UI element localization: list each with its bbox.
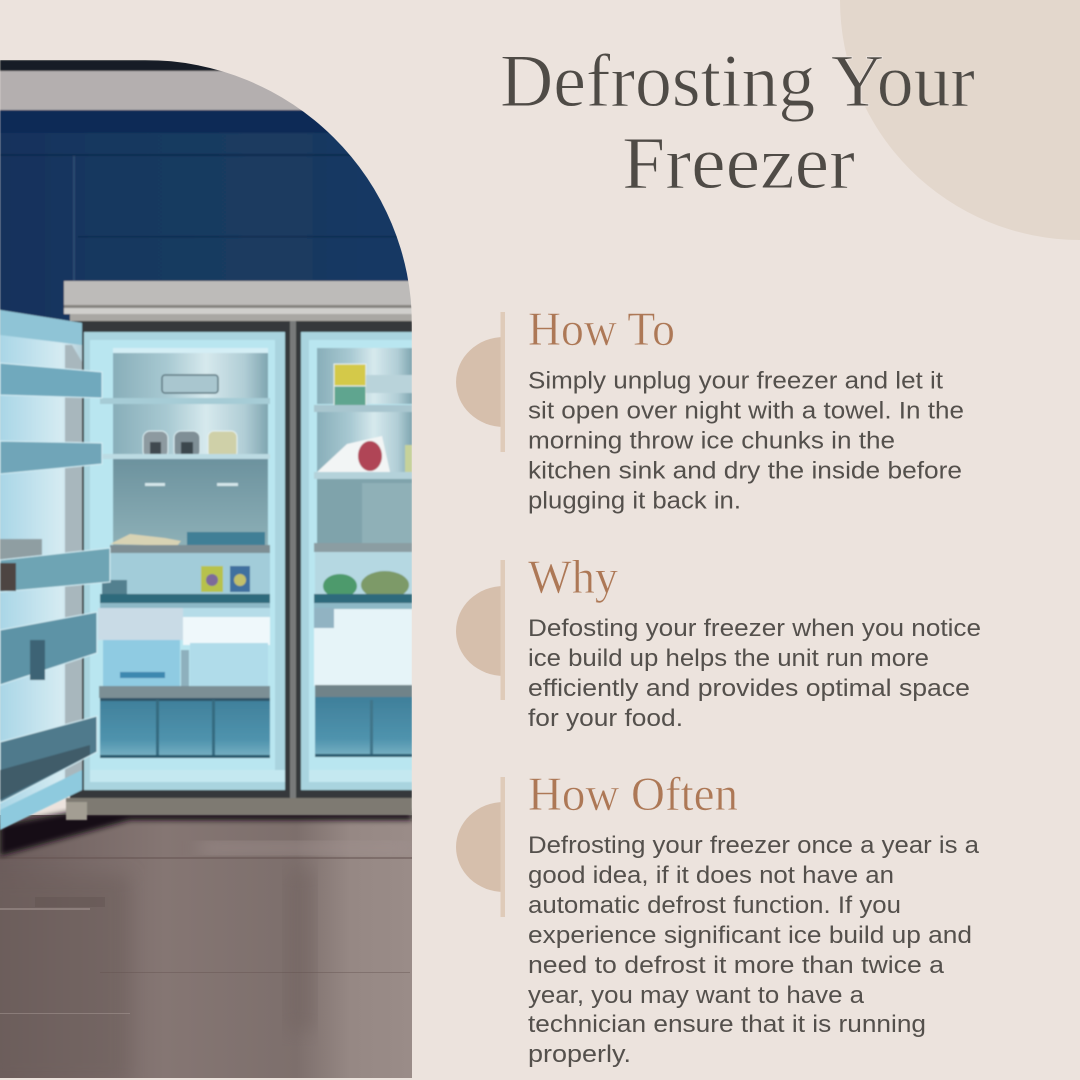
left compartment [84, 332, 285, 790]
open door [0, 310, 110, 830]
bottom drawer [100, 698, 270, 758]
photo: open refrigerator in arched frame [0, 60, 412, 1080]
back wall middle [113, 404, 268, 456]
white lower wall [314, 609, 412, 686]
section: how to [456, 303, 964, 514]
white panel [183, 617, 270, 645]
section: how often [456, 768, 979, 1068]
shelf two [314, 472, 412, 479]
shelf three [110, 545, 270, 553]
shelf five [315, 685, 412, 697]
green food box [334, 386, 366, 407]
yellow food box [334, 364, 366, 386]
blue cup [230, 566, 250, 592]
body text: Simply unplug your freezer and let it [528, 368, 943, 394]
steel back panel [113, 459, 268, 546]
door hinge column [65, 345, 82, 780]
body text: properly. [528, 1041, 631, 1068]
body text: kitchen sink and dry the inside before [528, 458, 962, 484]
shadow under fridge [0, 812, 412, 856]
shelf one [314, 405, 412, 412]
white bag with red fruit [317, 436, 412, 472]
vertical rule [500, 312, 505, 452]
shelf three [314, 543, 412, 552]
yellow cup [201, 566, 223, 592]
door bin one [0, 363, 102, 398]
body text: Defosting your freezer when you notice [528, 615, 981, 642]
shelf four [314, 594, 412, 603]
heading: Why [528, 551, 618, 604]
body text [528, 615, 981, 732]
body text: good idea, if it does not have an [528, 862, 894, 889]
shelf one [100, 398, 270, 404]
title [500, 40, 975, 205]
label plate [162, 375, 218, 393]
right compartment [301, 332, 412, 790]
body text: experience significant ice build up and [528, 922, 972, 949]
jars [143, 431, 237, 458]
body text: plugging it back in. [528, 488, 741, 514]
title: Defrosting Your [500, 40, 975, 123]
half circle marker [456, 802, 504, 892]
back wall top [113, 348, 268, 400]
body text: morning throw ice chunks in the [528, 428, 895, 454]
section: why [456, 551, 981, 732]
lavender panel [98, 608, 183, 640]
decorative quarter circle top right [840, 0, 1080, 240]
half circle marker [456, 337, 504, 427]
steel top of fridge [64, 281, 412, 321]
dark ceiling strip [0, 60, 224, 72]
title: Freezer [622, 122, 855, 205]
steel back panel [317, 479, 412, 544]
ceiling [0, 70, 303, 112]
shelf five [99, 686, 270, 698]
bins [103, 640, 268, 686]
bottom drawer [315, 697, 412, 757]
vertical rule [500, 777, 505, 917]
crisper top [102, 553, 270, 597]
body text [528, 832, 979, 1068]
door bin four [0, 612, 97, 685]
lower frame [309, 770, 412, 782]
body text: sit open over night with a towel. In the [528, 398, 964, 424]
body text: technician ensure that it is running [528, 1011, 926, 1038]
door bin three [0, 548, 110, 592]
body text [528, 368, 964, 514]
body text: Defrosting your freezer once a year is a [528, 832, 979, 859]
door jars [0, 539, 42, 561]
shelf two [100, 454, 270, 459]
door bin five [0, 716, 97, 803]
body text: need to defrost it more than twice a [528, 952, 944, 979]
vertical rule [500, 560, 505, 700]
label plate [366, 375, 412, 393]
half circle marker [456, 586, 504, 676]
body text: automatic defrost function. If you [528, 892, 901, 919]
fridge frame [70, 321, 412, 798]
body text: for your food. [528, 705, 683, 732]
body text: ice build up helps the unit run more [528, 645, 929, 672]
crisper with greens [315, 552, 412, 599]
lower frame [90, 770, 285, 782]
small grey tag [314, 608, 334, 628]
heading: How To [528, 303, 675, 356]
navy wall [0, 110, 412, 325]
body text: year, you may want to have a [528, 982, 864, 1009]
door lower edge [0, 770, 82, 830]
shelf four [100, 594, 270, 603]
heading: How Often [528, 768, 738, 821]
floor [0, 812, 412, 1080]
body text: efficiently and provides optimal space [528, 675, 970, 702]
fridge base [66, 798, 412, 820]
blue tray [187, 532, 265, 546]
center divider [290, 321, 296, 798]
folded food on shelf [110, 534, 181, 546]
door bin two [0, 441, 102, 474]
